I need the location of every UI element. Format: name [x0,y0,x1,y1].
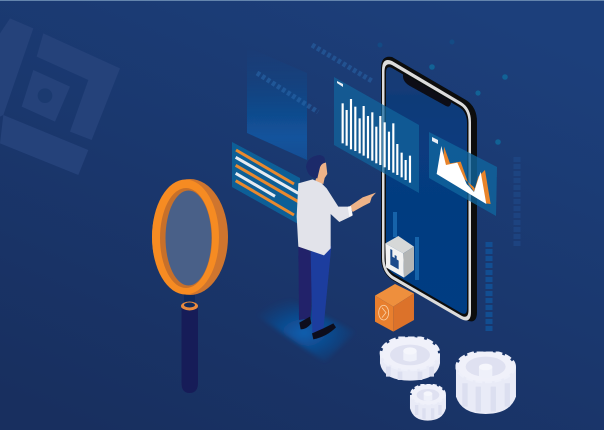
grey chart cube [385,236,414,278]
gear small [410,384,446,421]
data panel: text lines [232,142,300,225]
forearm and hand [350,193,376,212]
floating dots [378,40,508,145]
faint dotted strip far right [514,157,520,248]
glowing background panel [247,47,307,160]
shirt [297,179,353,255]
shoes [299,317,336,339]
back leg [298,245,313,320]
screen bars [393,212,419,280]
magnifying glass [152,179,228,393]
gear large [456,352,516,414]
dotted strip lower [257,73,318,112]
person pointing at phone [297,155,376,339]
smartphone [381,57,477,321]
dotted strip right [486,242,492,333]
floor glow under person [253,297,355,362]
shirt cuff [348,206,353,217]
dotted strip upper [312,45,372,81]
phone notch [403,73,451,107]
data panel: area chart [429,132,497,216]
front leg [311,246,331,333]
background logo mark [0,18,120,175]
orange play cube [375,284,414,332]
neck and face [315,163,327,184]
data panel: bar chart [334,77,419,193]
gear medium [380,337,440,381]
hair [306,155,325,178]
